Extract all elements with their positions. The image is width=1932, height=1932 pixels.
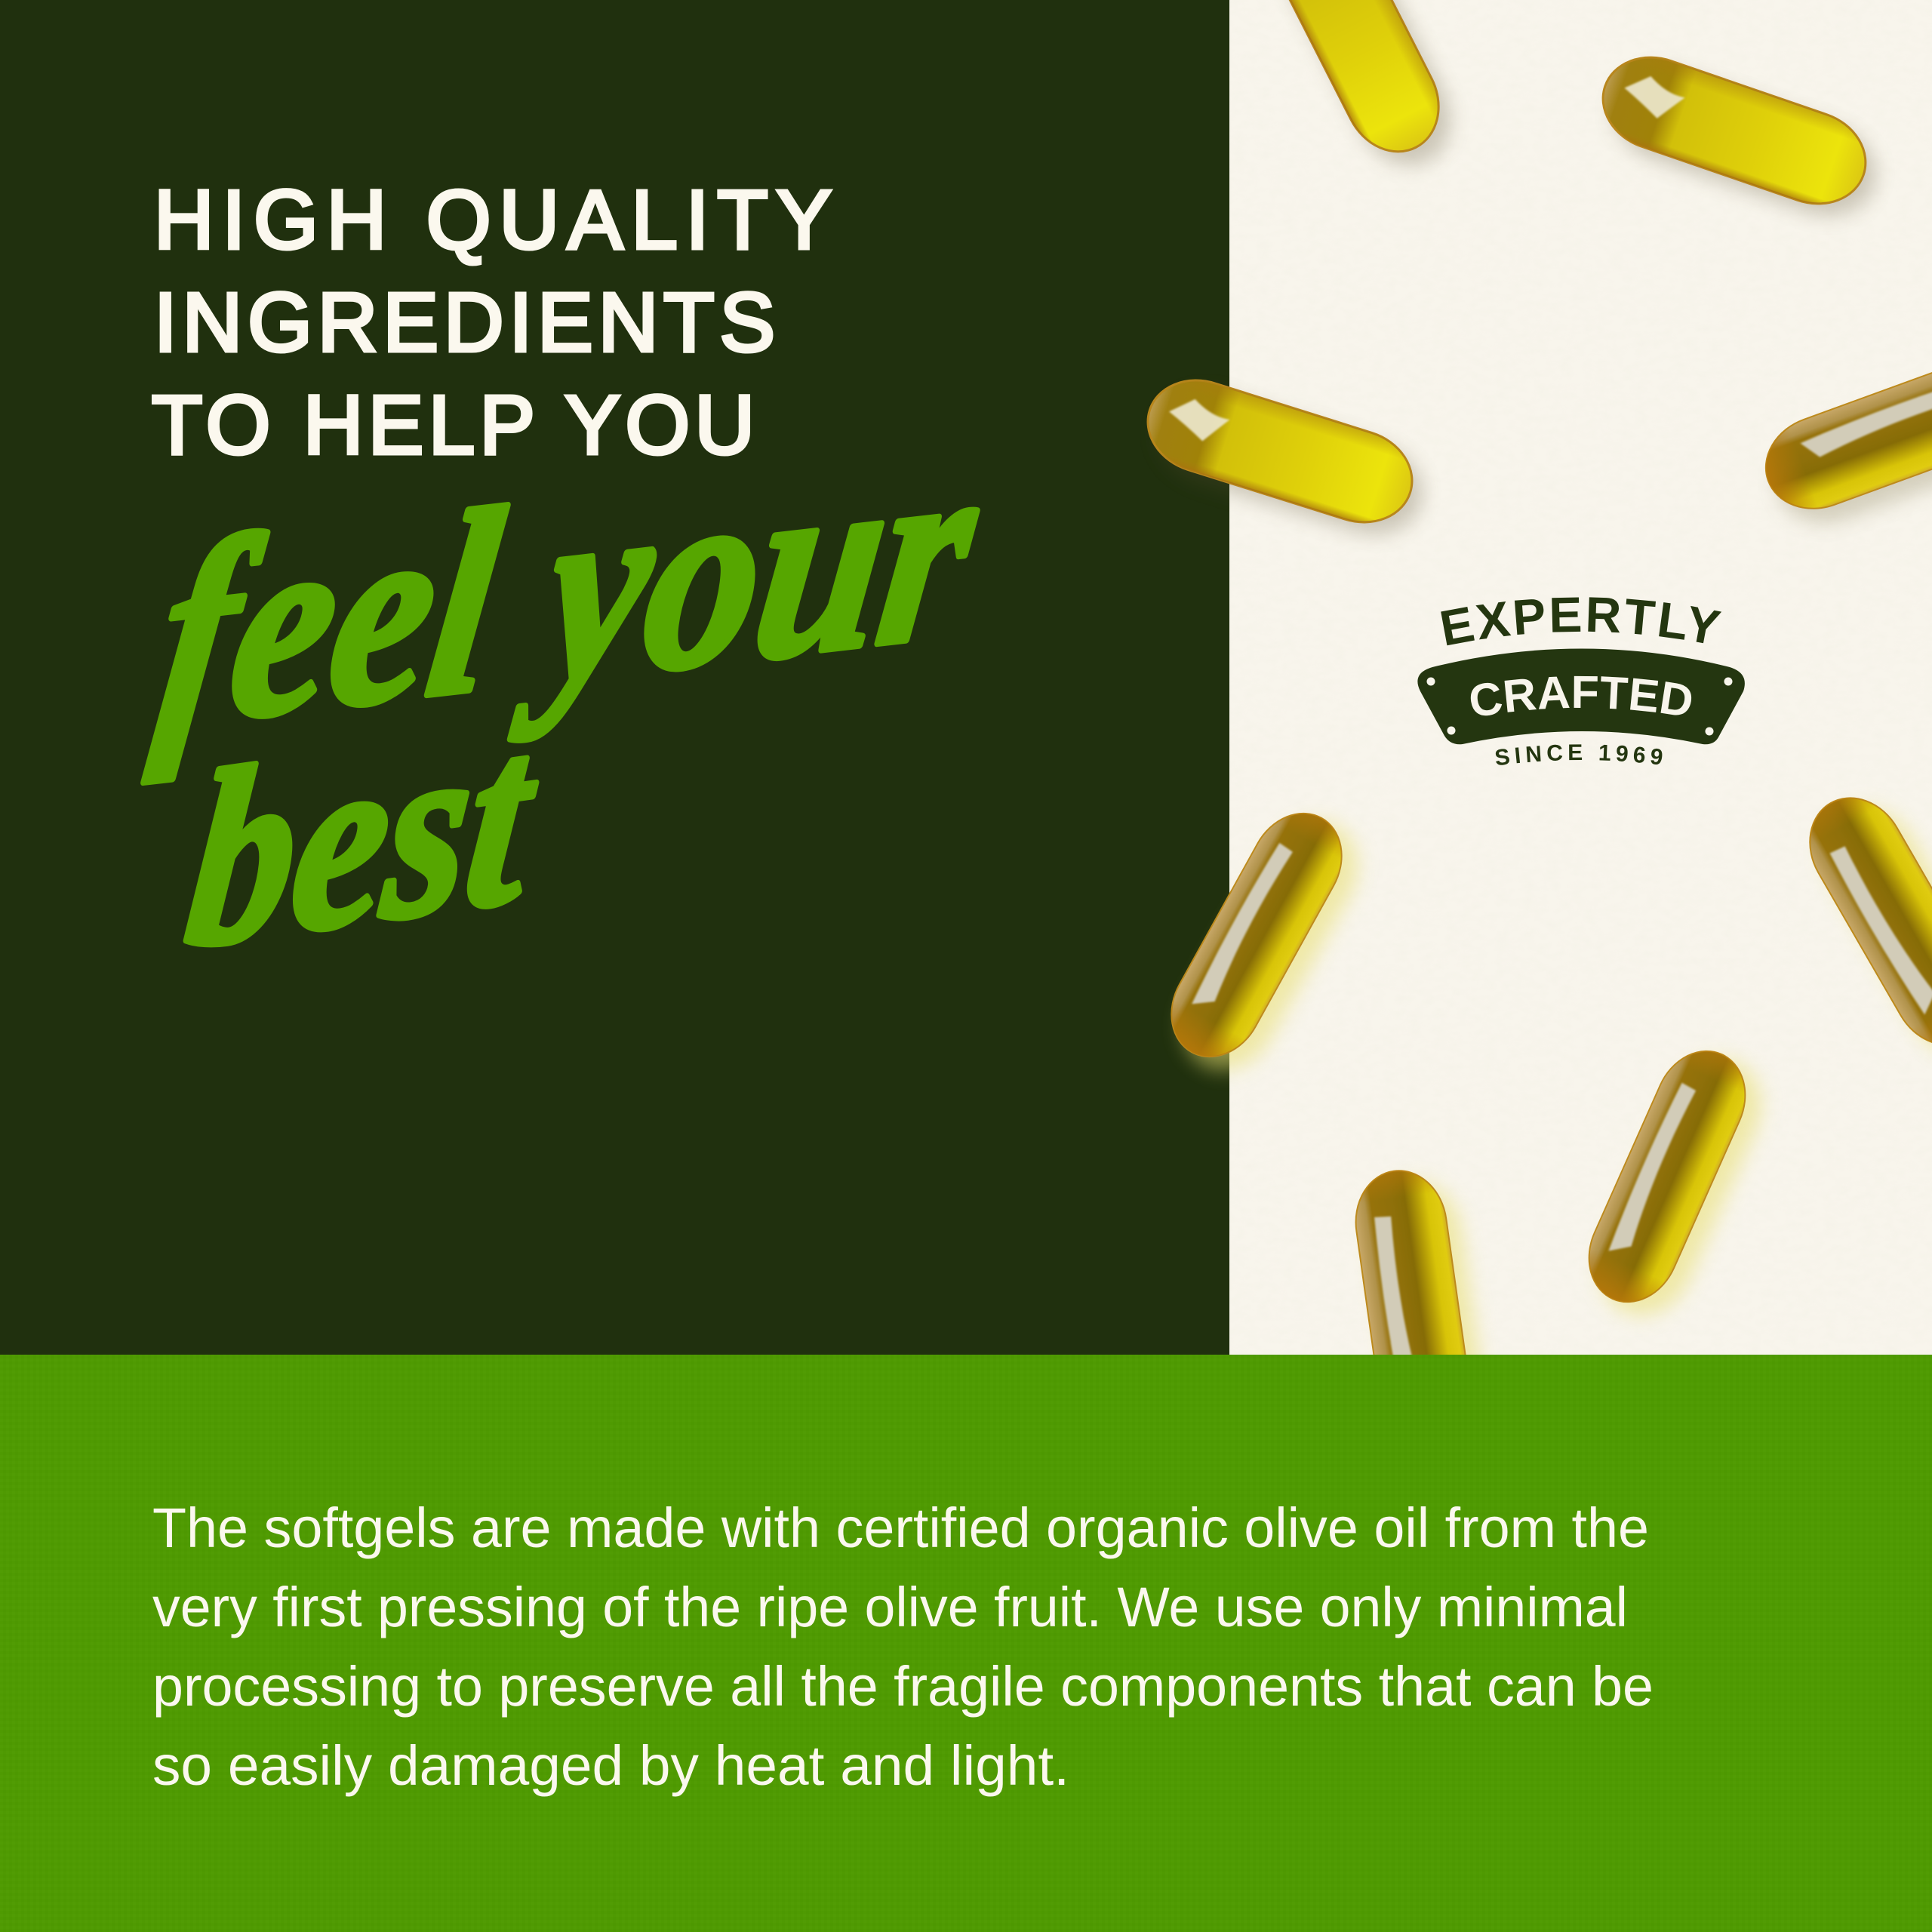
panel: cream paper <box>1229 0 1932 1355</box>
headline line 3: TO HELP YOU <box>152 379 755 472</box>
capsule: bottom centre <box>1349 1164 1492 1459</box>
description line 1: The softgels are made with certified organic olive oil from the <box>152 1497 1649 1559</box>
badge text: expertly: EXPERTLY <box>1441 597 1722 646</box>
badge banner <box>1417 649 1745 744</box>
script line 2: best <box>177 675 549 1001</box>
capsule: top right <box>1590 43 1889 230</box>
badge: expertly crafted <box>1417 597 1745 765</box>
script headline <box>143 399 994 1001</box>
description line 3: processing to preserve all the fragile components that can be <box>152 1655 1654 1718</box>
headline line 1: HIGH QUALITY <box>154 174 832 266</box>
capsule: crossing panel edge, lower <box>1154 797 1376 1087</box>
description text <box>152 1497 1654 1797</box>
script line 1: feel your <box>143 399 994 783</box>
panel: dark background <box>0 0 1229 1355</box>
capsule: right edge, lower <box>1792 780 1932 1073</box>
capsule: crossing panel edge, upper <box>1136 367 1435 548</box>
badge text: crafted: CRAFTED <box>1470 676 1692 715</box>
description line 2: very first pressing of the ripe olive fruit. We use only minimal <box>152 1576 1628 1638</box>
description line 4: so easily damaged by heat and light. <box>152 1734 1069 1797</box>
capsule: right edge, upper <box>1752 345 1932 537</box>
headline <box>152 174 832 472</box>
capsule: top centre <box>1251 0 1469 182</box>
badge text: since 1969: SINCE 1969 <box>1496 744 1662 765</box>
softgel capsules <box>1136 0 1932 1459</box>
headline line 2: INGREDIENTS <box>154 276 775 369</box>
capsule: bottom right <box>1573 1037 1777 1331</box>
panel: green description band <box>0 1355 1932 1932</box>
badge rivets <box>1426 678 1733 735</box>
